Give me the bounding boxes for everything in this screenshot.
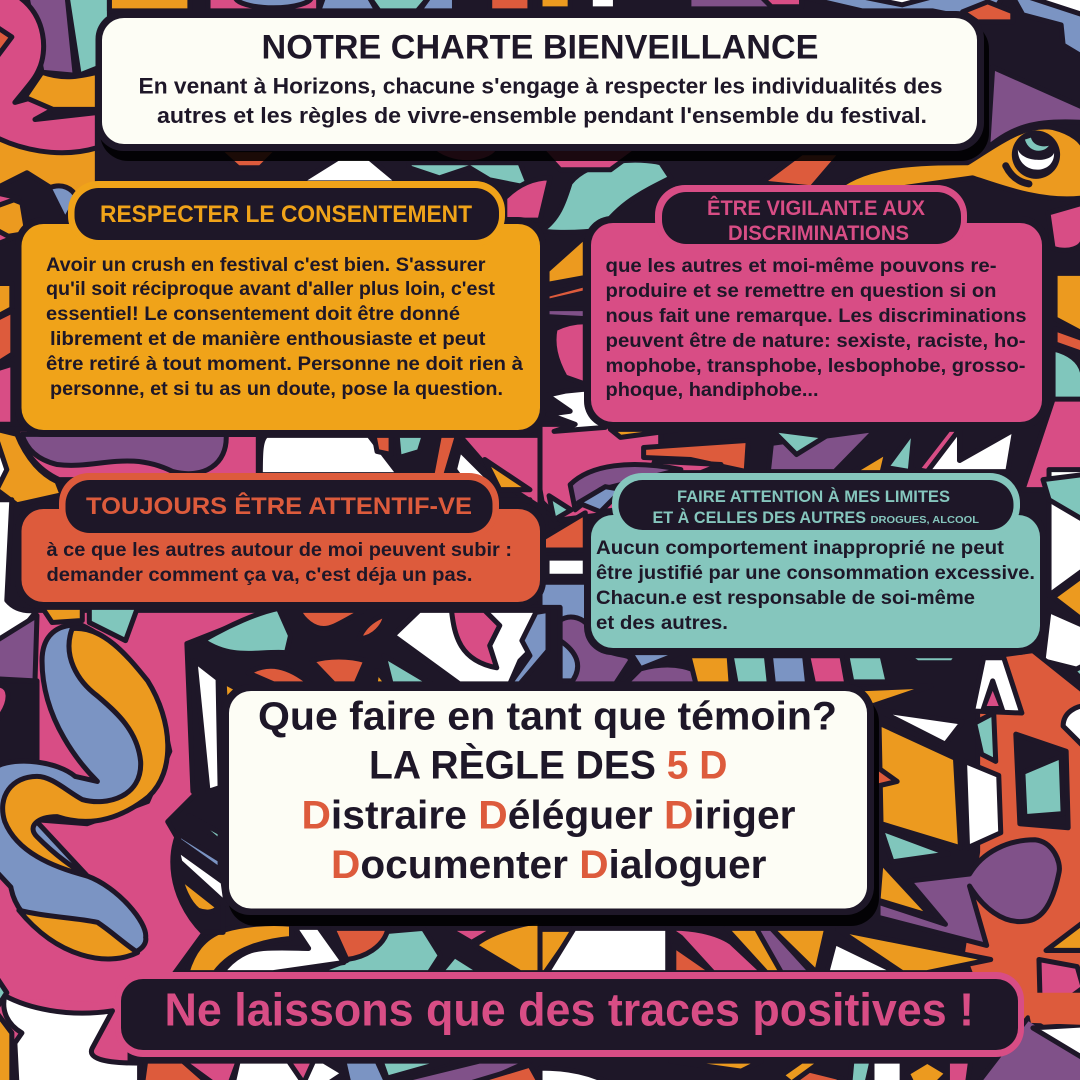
text: discriminations body: produire et se remettre en question si on [606,281,996,302]
text: limites body: et des autres. [596,613,728,634]
text: attentif body: à ce que les autres autour de moi peuvent subir : [46,540,512,561]
text: limites body: Chacun.e est responsable de soi-même [596,588,975,609]
panel: règle des 5 D [222,684,879,926]
panel: respecter le consentement [15,181,546,437]
banner: ne laissons que des traces positives: Ne laissons que des traces positives ! [164,984,974,1036]
heading: faire attention à mes limites: FAIRE ATTENTION À MES LIMITES [677,487,950,506]
heading: faire attention à mes limites: ET À CELLES DES AUTRES [652,508,866,527]
heading: être vigilant.e aux discriminations: DISCRIMINATIONS [728,222,909,245]
text: discriminations body: nous fait une remarque. Les discriminations [606,306,1026,327]
text: discriminations body: phoque, handiphobe... [606,380,818,401]
text: consentement body: Avoir un crush en festival c'est bien. S'assurer [46,255,486,276]
heading: title: NOTRE CHARTE BIENVEILLANCE [262,28,818,66]
text: consentement body: essentiel! Le consentement doit être donné [46,304,460,325]
heading: être vigilant.e aux discriminations [707,196,925,245]
text: intro line 2: autres et les règles de vivre-ensemble pendant l'ensemble du festival. [157,103,927,128]
banner: ne laissons que des traces positives [115,972,1024,1057]
panel: toujours être attentif-ve [15,473,546,609]
panel: être vigilant.e aux discriminations [584,185,1049,429]
text: discriminations body [606,256,1026,401]
text: consentement body: qu'il soit réciproque avant d'aller plus loin, c'est [46,279,496,300]
text: attentif body: demander comment ça va, c'est déja un pas. [46,565,472,586]
text: discriminations body: mophobe, transphobe, lesbophobe, grosso- [606,356,1026,377]
heading: être vigilant.e aux discriminations: ÊTRE VIGILANT.E AUX [707,196,925,220]
text: discriminations body: que les autres et moi-même pouvons re- [606,256,996,277]
text: limites body: Aucun comportement inapproprié ne peut [596,538,1005,559]
text: discriminations body: peuvent être de nature: sexiste, raciste, ho- [606,331,1026,352]
heading: faire attention à mes limites: DROGUES, ALCOOL [870,515,979,526]
heading: faire attention à mes limites [652,487,979,527]
panel: faire attention à mes limites [584,473,1046,655]
text: intro line 1: En venant à Horizons, chacune s'engage à respecter les individualités des [138,74,942,98]
text: consentement body: librement et de manière enthousiaste et peut [50,329,486,350]
panel: title [96,11,989,161]
heading: respecter le consentement: RESPECTER LE CONSENTEMENT [100,201,472,228]
text: limites body: être justifié par une consommation excessive. [596,563,1035,584]
text: consentement body: être retiré à tout moment. Personne ne doit rien à [46,354,523,375]
heading: que faire en tant que témoin: Que faire en tant que témoin? [258,694,837,738]
text: consentement body [46,255,523,400]
text: consentement body: personne, et si tu as un doute, pose la question. [50,379,503,400]
heading: toujours être attentif-ve: TOUJOURS ÊTRE ATTENTIF-VE [86,492,472,520]
text: distraire déléguer diriger: Distraire Déléguer Diriger [302,794,796,838]
text: attentif body [46,540,512,586]
text: limites body [596,538,1035,634]
text: documenter dialoguer: Documenter Dialoguer [331,843,766,887]
heading: la règle des 5 D: LA RÈGLE DES 5 D [369,742,727,788]
